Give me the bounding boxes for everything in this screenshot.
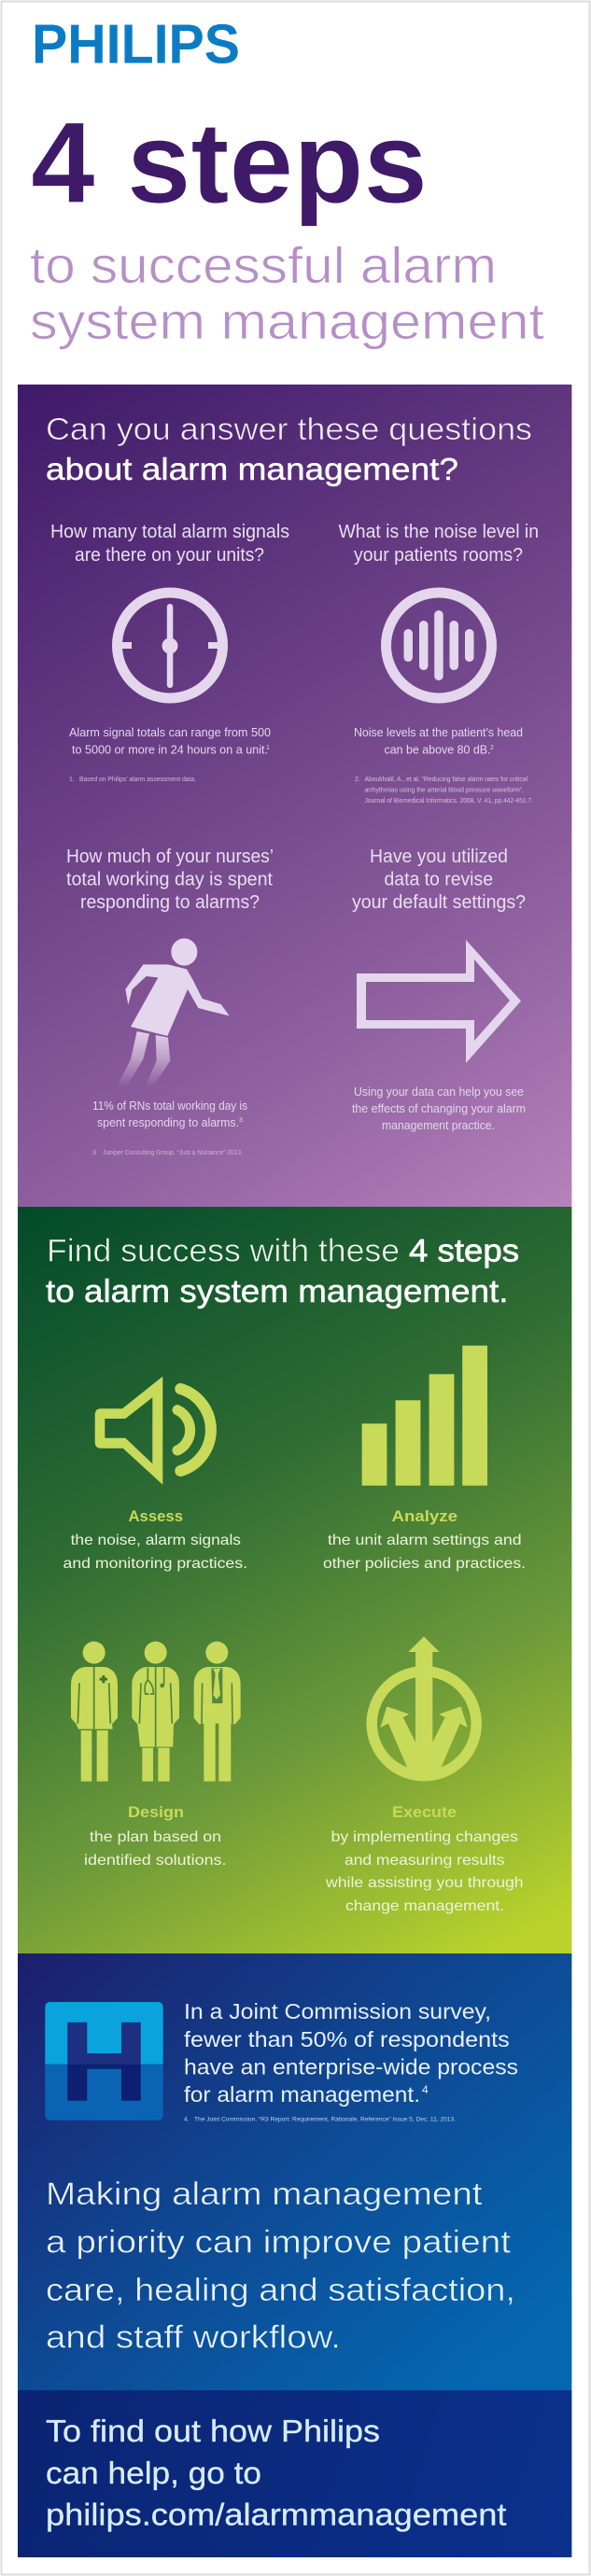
footnote 3: 3 xyxy=(92,1150,96,1156)
person: nurse xyxy=(71,1642,118,1782)
answer text: management practice. xyxy=(382,1118,495,1132)
priority statement: and staff workflow. xyxy=(46,2320,341,2356)
answer text: spent responding to alarms. xyxy=(97,1115,239,1129)
person: administrator xyxy=(194,1642,241,1782)
heading: can you answer these questions xyxy=(46,412,532,486)
answer text: 3 xyxy=(239,1117,243,1124)
step title: Analyze xyxy=(392,1507,457,1525)
footnote 1: 1. xyxy=(69,777,75,783)
step: design xyxy=(71,1642,241,1869)
step title: Design xyxy=(128,1803,184,1821)
survey text: for alarm management. xyxy=(184,2082,420,2107)
footnote 2: arrhythmias using the arterial blood pressure waveform”, xyxy=(364,788,524,794)
question text xyxy=(66,847,274,913)
footnote 2: Aboukhalil, A., et al. “Reducing false alarm rates for critical xyxy=(364,777,528,783)
question text: responding to alarms? xyxy=(80,892,260,913)
footnote 2 xyxy=(355,777,533,805)
step: assess xyxy=(63,1377,247,1572)
answer text: Noise levels at the patient’s head xyxy=(354,725,523,739)
answer text xyxy=(92,1099,247,1129)
icon: bar chart xyxy=(362,1346,487,1486)
question text: How much of your nurses’ xyxy=(66,847,274,867)
footnote 3: Juniper Consulting Group. “Just a Nuisance” 2013. xyxy=(103,1150,243,1156)
subtitle xyxy=(30,236,544,350)
person: doctor xyxy=(132,1642,179,1782)
green panel background xyxy=(18,1207,571,1953)
question text xyxy=(50,522,289,566)
answer text xyxy=(354,725,523,756)
question text xyxy=(352,847,526,913)
icon: outlined arrow xyxy=(357,940,521,1063)
question block: noise level xyxy=(338,522,539,805)
step text: while assisting you through xyxy=(325,1875,524,1891)
answer text: Using your data can help you see xyxy=(354,1085,524,1099)
heading: find success with these 4 steps xyxy=(46,1234,519,1309)
blue panel background xyxy=(18,1953,571,2390)
step text xyxy=(325,1829,524,1914)
step text: change management. xyxy=(345,1898,504,1914)
call to action text: can help, go to xyxy=(46,2456,261,2490)
heading: can you answer these questions: Can you answer these questions xyxy=(46,412,532,446)
navy panel background xyxy=(18,2390,571,2557)
panel: questions about alarm management xyxy=(18,385,571,1207)
step text: identified solutions. xyxy=(84,1853,226,1869)
step text: and monitoring practices. xyxy=(63,1556,247,1572)
call to action text: To find out how Philips xyxy=(46,2414,380,2448)
step text xyxy=(63,1533,247,1572)
question text: Have you utilized xyxy=(370,847,508,867)
call to action text xyxy=(46,2414,506,2531)
question text: your default settings? xyxy=(352,892,526,913)
icon: running nurse xyxy=(117,938,230,1087)
step text: and measuring results xyxy=(345,1853,504,1869)
step title: Assess xyxy=(129,1507,183,1525)
survey text: 4 xyxy=(422,2083,429,2096)
question block: total alarm signals xyxy=(50,522,289,783)
footnote 2: Journal of Biomedical Informatics. 2008, V. 41, pp.442-451.7. xyxy=(364,798,533,805)
question text: How many total alarm signals xyxy=(50,522,289,542)
priority statement xyxy=(46,2177,515,2356)
purple panel background xyxy=(18,385,571,1207)
step: execute xyxy=(325,1636,524,1914)
heading: find success with these 4 steps: 4 steps xyxy=(409,1234,519,1269)
step text xyxy=(84,1829,226,1869)
heading: find success with these 4 steps: to alarm system management. xyxy=(46,1274,508,1309)
answer text: can be above 80 dB. xyxy=(385,743,491,756)
subtitle: system management xyxy=(30,292,544,350)
heading: can you answer these questions: about alarm management? xyxy=(46,452,458,486)
step text xyxy=(323,1533,526,1572)
answer text: Alarm signal totals can range from 500 xyxy=(69,725,271,739)
survey text: fewer than 50% of respondents xyxy=(184,2027,510,2051)
step text: the unit alarm settings and xyxy=(328,1533,522,1548)
step text: other policies and practices. xyxy=(323,1556,526,1572)
panel: survey and priority xyxy=(18,1953,571,2390)
priority statement: a priority can improve patient xyxy=(46,2225,512,2261)
answer text: the effects of changing your alarm xyxy=(352,1101,526,1115)
answer text: to 5000 or more in 24 hours on a unit. xyxy=(72,743,268,756)
answer text xyxy=(352,1085,526,1132)
answer text xyxy=(69,725,271,756)
question block: nurses working day xyxy=(66,847,274,1156)
survey text xyxy=(184,1999,518,2107)
survey text: have an enterprise-wide process xyxy=(184,2055,518,2079)
panel: call to action xyxy=(18,2390,571,2557)
question text: total working day is spent xyxy=(66,870,273,890)
subtitle: to successful alarm xyxy=(30,236,497,294)
question text: your patients rooms? xyxy=(354,545,523,566)
priority statement: care, healing and satisfaction, xyxy=(46,2273,515,2308)
priority statement: Making alarm management xyxy=(46,2177,483,2212)
step title: Execute xyxy=(392,1803,457,1821)
icon: hospital H xyxy=(45,2002,163,2121)
step text: the noise, alarm signals xyxy=(71,1533,241,1548)
answer text: 2 xyxy=(490,745,494,751)
question text xyxy=(338,522,539,566)
heading: find success with these 4 steps: Find success with these xyxy=(47,1234,400,1269)
step: analyze xyxy=(323,1346,526,1572)
survey text: In a Joint Commission survey, xyxy=(184,1999,491,2023)
question text: What is the noise level in xyxy=(338,522,539,542)
logo: Philips wordmark: PHILIPS xyxy=(32,13,240,75)
call to action text: philips.com/alarmmanagement xyxy=(46,2498,506,2531)
step text: by implementing changes xyxy=(331,1829,518,1845)
icon: sound wave in ring xyxy=(387,593,491,698)
footnote 4: The Joint Commission. “R3 Report: Requirement, Rationale, Reference” Issue 5, Dec. 11, 2013. xyxy=(194,2117,456,2123)
icon: three care team members xyxy=(71,1642,241,1782)
answer text: 11% of RNs total working day is xyxy=(92,1099,247,1113)
icon: clock xyxy=(118,593,222,698)
footnote 1: Based on Philips’ alarm assessment data. xyxy=(79,777,196,783)
icon: arrows in ring xyxy=(372,1636,476,1776)
question text: are there on your units? xyxy=(75,545,264,566)
question text: data to revise xyxy=(385,870,493,890)
footnote 4: 4. xyxy=(184,2117,190,2123)
question block: default settings xyxy=(352,847,526,1132)
step text: the plan based on xyxy=(90,1829,221,1845)
icon: speaker xyxy=(95,1377,211,1485)
panel: four steps xyxy=(18,1207,571,1953)
footnote 2: 2. xyxy=(355,777,360,783)
answer text: 1 xyxy=(266,745,270,751)
title: 4 steps: 4 steps xyxy=(31,100,428,228)
